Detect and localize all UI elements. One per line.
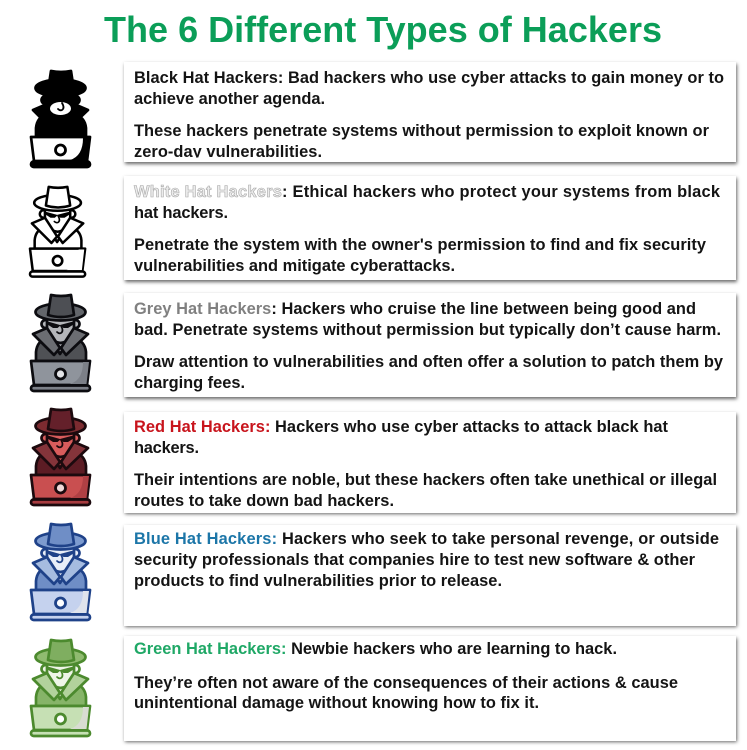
title: The 6 Different Types of Hackers — [104, 9, 662, 50]
detail text: white hat: Penetrate the system with the owner's permission to find and fix security — [134, 236, 707, 254]
detail continuation: black hat: zero-day vulnerabilities. — [134, 143, 322, 161]
detail continuation: green hat: unintentional damage without knowing how to fix it. — [134, 694, 539, 712]
definition continuation: black hat: achieve another agenda. — [134, 90, 325, 108]
detail text: blue hat: products to find vulnerabilities prior to release. — [134, 572, 502, 590]
detail text: red hat: Their intentions are noble, but these hackers often take unethical or illegal — [134, 471, 717, 489]
icon: green hat hacker — [31, 640, 90, 736]
panel: grey hat hackers — [124, 293, 737, 399]
icon: blue hat hacker — [31, 524, 90, 620]
heading and definition: green hat: Green Hat Hackers: Newbie hackers who are learning to hack. — [134, 640, 617, 658]
detail text: grey hat: Draw attention to vulnerabilities and often offer a solution to patch them by — [134, 353, 724, 371]
heading and definition: blue hat: Blue Hat Hackers: Hackers who seek to take personal revenge, or outside — [134, 530, 719, 548]
panel: black hat hackers — [124, 62, 737, 164]
icon: red hat hacker — [31, 409, 90, 505]
heading and definition: grey hat: Grey Hat Hackers: Hackers who cruise the line between being good and — [134, 300, 696, 318]
detail text: green hat: They’re often not aware of the consequences of their actions & cause — [134, 674, 678, 692]
definition continuation: grey hat: bad. Penetrate systems without permission but typically don’t cause harm. — [134, 321, 721, 339]
panel: blue hat hackers — [124, 525, 737, 627]
definition continuation: white hat: hat hackers. — [134, 204, 228, 222]
clipped text edge: black hat — [126, 158, 366, 162]
detail text: black hat: These hackers penetrate systems without permission to exploit known or — [134, 122, 710, 140]
panel: white hat hackers — [124, 176, 737, 282]
heading and definition: white hat: White Hat Hackers: Ethical hackers who protect your systems from black — [134, 183, 721, 201]
panel: green hat hackers — [124, 636, 737, 742]
heading and definition: black hat: Black Hat Hackers: Bad hackers who use cyber attacks to gain money or to — [134, 69, 724, 87]
detail continuation: white hat: vulnerabilities and mitigate cyberattacks. — [134, 257, 455, 275]
heading and definition: red hat: Red Hat Hackers: Hackers who use cyber attacks to attack black hat — [134, 418, 669, 436]
panel: red hat hackers — [124, 412, 737, 514]
icon: black hat hacker — [31, 71, 90, 167]
definition continuation: red hat: hackers. — [134, 439, 199, 457]
detail continuation: grey hat: charging fees. — [134, 374, 245, 392]
icon: grey hat hacker — [31, 295, 90, 391]
detail continuation: red hat: routes to take down bad hackers. — [134, 492, 394, 510]
icon: white hat hacker — [30, 187, 85, 277]
definition continuation: blue hat: security professionals that companies hire to test new software & other — [134, 551, 696, 569]
